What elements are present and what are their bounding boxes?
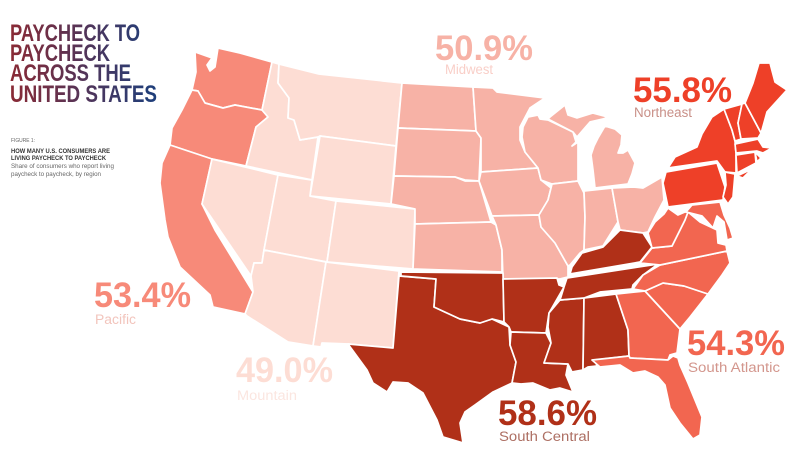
label: Mountain: Mountain (237, 388, 297, 403)
label: Midwest: 50.9% (435, 29, 533, 68)
label: Midwest: Midwest (445, 62, 493, 77)
title: PAYCHECK TO (10, 20, 140, 47)
label: Northeast: Northeast (634, 105, 692, 120)
label: Mountain: 49.0% (236, 351, 333, 390)
figure caption: Share of consumers who report living (11, 164, 114, 170)
title (10, 20, 157, 108)
figure caption: paycheck to paycheck, by region (11, 172, 101, 178)
title: UNITED STATES (10, 81, 157, 108)
title: PAYCHECK (10, 40, 111, 67)
title: ACROSS THE (10, 60, 131, 87)
map: Mountain states (202, 62, 415, 348)
label: Northeast: 55.8% (633, 71, 732, 110)
label: South Atlantic: 54.3% (687, 324, 785, 363)
figure caption: LIVING PAYCHECK TO PAYCHECK (11, 156, 107, 162)
map: Pacific states (160, 48, 272, 314)
label: Pacific: Pacific (95, 312, 136, 327)
map: South Atlantic states (592, 202, 733, 439)
map: South Central states (348, 230, 658, 443)
label: South Atlantic: South Atlantic (688, 360, 780, 375)
figure caption: HOW MANY U.S. CONSUMERS ARE (11, 149, 110, 155)
label: Pacific: 53.4% (94, 276, 191, 315)
map: Midwest states (391, 83, 664, 279)
label: South Central: South Central (499, 429, 590, 444)
figure caption (11, 138, 114, 178)
label: South Central: 58.6% (498, 394, 597, 433)
figure caption: FIGURE 1: (11, 138, 35, 144)
map: Northeast states (663, 63, 787, 207)
